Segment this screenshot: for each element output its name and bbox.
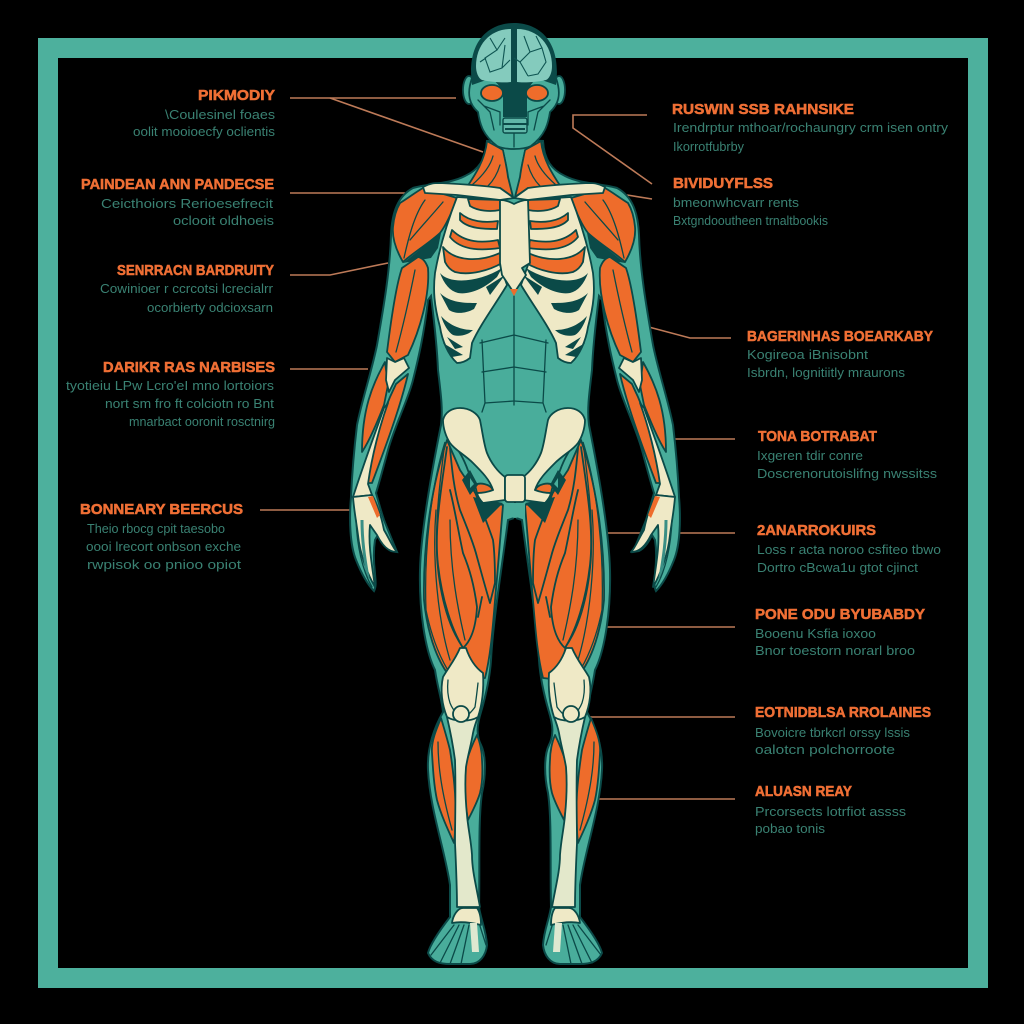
right label: ALUASN REAY: ALUASN REAY xyxy=(755,783,852,800)
right label: ALUASN REAY xyxy=(755,783,907,836)
sternum xyxy=(500,200,530,293)
left label: DARIKR RAS NARBISES: tyotieiu LPw Lcro'eI mno lortoiors xyxy=(66,378,275,393)
left label: PAINDEAN ANN PANDECSE: oclooit oldhoeis xyxy=(173,213,275,228)
left label: PIKMODIY: PIKMODIY xyxy=(198,87,275,104)
right label: BIVIDUYFLSS xyxy=(673,175,828,228)
left label: PAINDEAN ANN PANDECSE: PAINDEAN ANN PANDECSE xyxy=(81,176,274,193)
right label: 2ANARROKUIRS: 2ANARROKUIRS xyxy=(757,522,876,539)
head xyxy=(463,23,565,149)
right label: RUSWIN SSB RAHNSIKE: Irendrptur mthoar/rochaungry crm isen ontry xyxy=(673,120,949,135)
right label: TONA BOTRABAT: Ixgeren tdir conre xyxy=(757,448,863,463)
body silhouette right half xyxy=(516,140,680,964)
left label: SENRRACN BARDRUITY xyxy=(100,262,274,315)
right label: RUSWIN SSB RAHNSIKE xyxy=(672,101,949,154)
right label: TONA BOTRABAT: Doscrenorutoislifng nwssitss xyxy=(757,466,938,481)
right lower leg xyxy=(546,648,601,964)
right label: BIVIDUYFLSS: BIVIDUYFLSS xyxy=(673,175,773,192)
right label: TONA BOTRABAT xyxy=(757,428,938,481)
left label: DARIKR RAS NARBISES: nort sm fro ft colciotn ro Bnt xyxy=(105,396,274,411)
right label: EOTNIDBLSA RROLAINES: oalotcn polchorroote xyxy=(755,742,895,757)
right label: BAGERINHAS BOEARKABY: BAGERINHAS BOEARKABY xyxy=(747,328,933,345)
left label: BONNEARY BEERCUS xyxy=(80,501,243,572)
eyes xyxy=(481,85,503,101)
right label: BAGERINHAS BOEARKABY xyxy=(747,328,933,380)
right side muscles and bones xyxy=(514,141,675,680)
left lower leg xyxy=(431,648,486,964)
right label: BIVIDUYFLSS: bmeonwhcvarr rents xyxy=(673,195,800,210)
right label: 2ANARROKUIRS: Loss r acta noroo csfiteo tbwo xyxy=(757,542,941,557)
left label: BONNEARY BEERCUS: BONNEARY BEERCUS xyxy=(80,501,243,518)
left label: PIKMODIY: oolit mooioecfy oclientis xyxy=(133,124,276,139)
right label: ALUASN REAY: Prcorsects lotrfiot assss xyxy=(755,804,907,819)
sternum tip xyxy=(510,289,518,296)
brain left lobe xyxy=(476,29,511,82)
right label: EOTNIDBLSA RROLAINES: Bovoicre tbrkcrl orssy lssis xyxy=(755,725,911,740)
right label: ALUASN REAY: pobao tonis xyxy=(755,821,826,836)
brain folds xyxy=(480,36,546,76)
neck wedge xyxy=(503,146,525,196)
connector lines xyxy=(260,98,735,799)
mouth xyxy=(503,118,527,133)
left label: SENRRACN BARDRUITY: ocorbierty odcioxsarn xyxy=(147,300,273,315)
brain right lobe xyxy=(517,29,552,82)
left label: BONNEARY BEERCUS: rwpisok oo pnioo opiot xyxy=(87,557,241,572)
right label: PONE ODU BYUBABDY: PONE ODU BYUBABDY xyxy=(755,606,925,623)
pubic symphysis xyxy=(505,475,525,502)
left label: DARIKR RAS NARBISES xyxy=(66,359,275,429)
below pelvis xyxy=(505,503,525,518)
left label: PAINDEAN ANN PANDECSE: Ceicthoiors Rerioesefrecit xyxy=(101,196,273,211)
cheek lines xyxy=(478,100,550,147)
right label: BIVIDUYFLSS: Bxtgndooutheen trnaltbookis xyxy=(673,213,828,228)
right label: 2ANARROKUIRS: Dortro cBcwa1u gtot cjinct xyxy=(757,560,918,575)
right label: PONE ODU BYUBABDY xyxy=(755,606,925,658)
left side muscles and bones xyxy=(353,141,514,680)
right label: PONE ODU BYUBABDY: Bnor toestorn norarl broo xyxy=(755,643,915,658)
face xyxy=(469,78,559,149)
right label: EOTNIDBLSA RROLAINES xyxy=(755,704,931,757)
right label: RUSWIN SSB RAHNSIKE: Ikorrotfubrby xyxy=(673,139,744,154)
left label: PIKMODIY: \Coulesinel foaes xyxy=(165,107,276,122)
left label: BONNEARY BEERCUS: oooi lrecort onbson exche xyxy=(86,539,241,554)
right label: BAGERINHAS BOEARKABY: Isbrdn, lognitiitly mraurons xyxy=(747,365,906,380)
left label: PAINDEAN ANN PANDECSE xyxy=(81,176,275,228)
left label: DARIKR RAS NARBISES: DARIKR RAS NARBISES xyxy=(103,359,275,376)
left label: PIKMODIY xyxy=(133,87,276,139)
left label: DARIKR RAS NARBISES: mnarbact ooronit rosctnirg xyxy=(129,414,275,429)
right label: EOTNIDBLSA RROLAINES: EOTNIDBLSA RROLAINES xyxy=(755,704,931,721)
ears xyxy=(463,76,475,104)
right label: 2ANARROKUIRS xyxy=(757,522,941,575)
right label: TONA BOTRABAT: TONA BOTRABAT xyxy=(758,428,877,445)
right label: PONE ODU BYUBABDY: Booenu Ksfia ioxoo xyxy=(755,626,876,641)
abdomen centre line xyxy=(513,296,515,405)
right label: RUSWIN SSB RAHNSIKE: RUSWIN SSB RAHNSIKE xyxy=(672,101,854,118)
torso fill seam xyxy=(495,150,533,502)
left label: SENRRACN BARDRUITY: Cowinioer r ccrcotsi lcrecialrr xyxy=(100,281,274,296)
left label: BONNEARY BEERCUS: Theio rbocg cpit taesobo xyxy=(87,521,225,536)
cranium and mask xyxy=(471,23,557,117)
anatomical figure xyxy=(350,23,680,964)
right label: BAGERINHAS BOEARKABY: Kogireoa iBnisobnt xyxy=(747,347,868,362)
body silhouette left half xyxy=(350,140,514,964)
left label: SENRRACN BARDRUITY: SENRRACN BARDRUITY xyxy=(117,262,274,279)
